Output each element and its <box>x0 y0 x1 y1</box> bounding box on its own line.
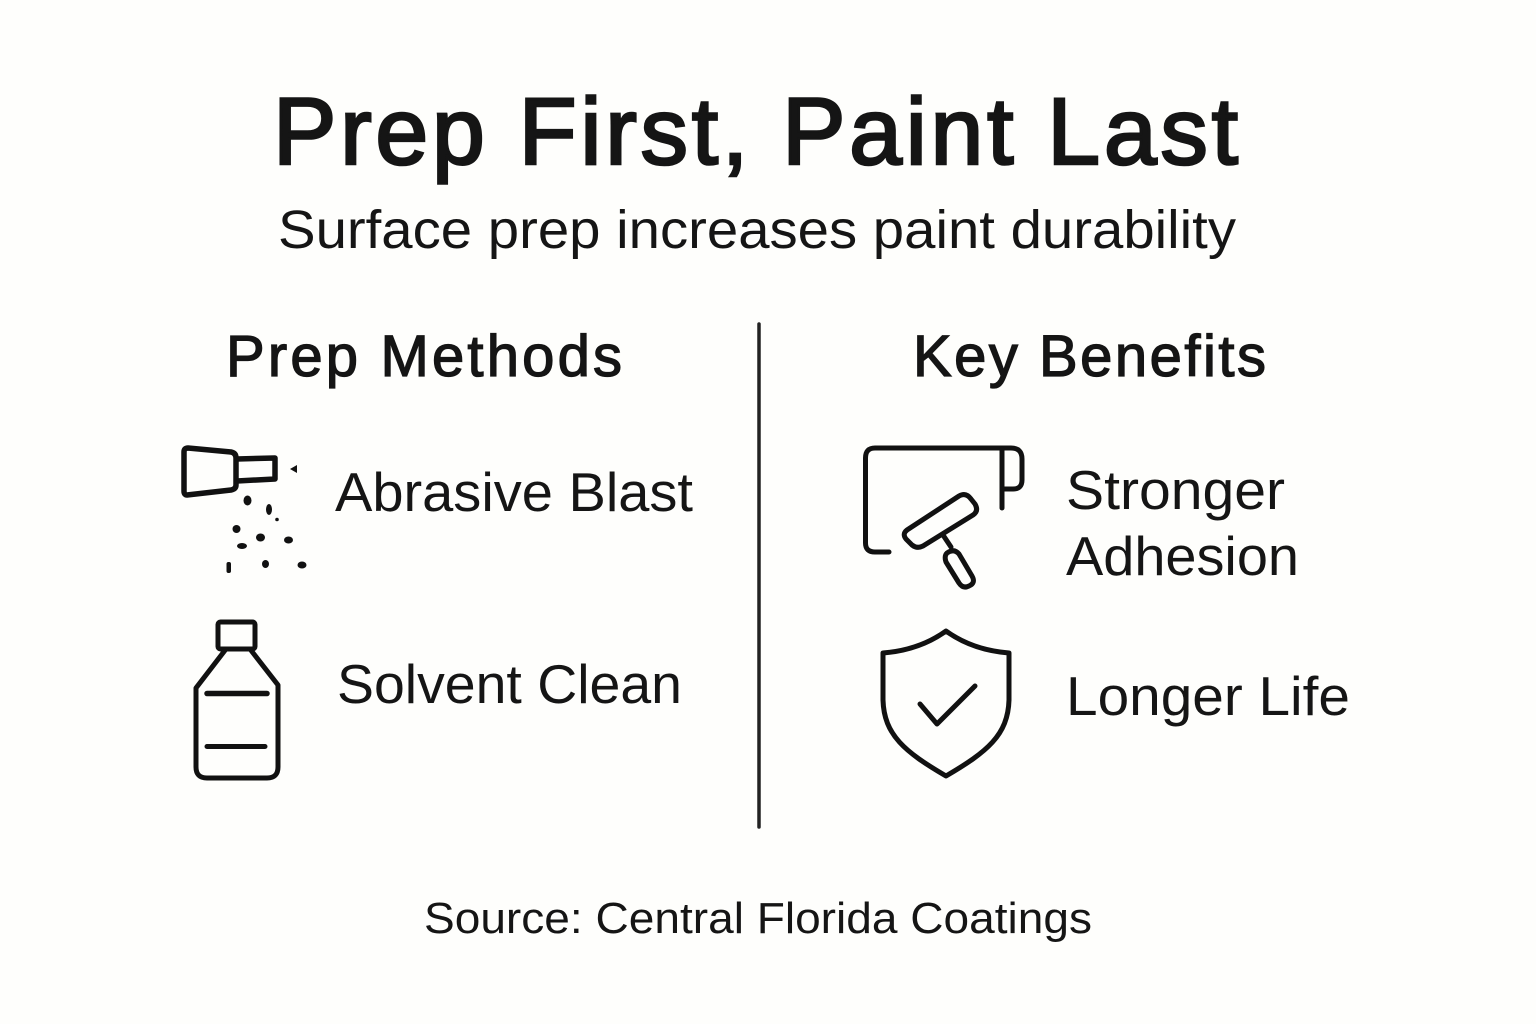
label: solvent clean: Solvent Clean <box>337 653 682 715</box>
heading: prep methods: Prep Methods <box>226 324 622 389</box>
icon: shield with check <box>883 631 1009 776</box>
label: stronger adhesion <box>1066 459 1299 587</box>
label: stronger adhesion: Stronger <box>1066 459 1285 521</box>
center divider <box>757 324 761 827</box>
subtitle: Surface prep increases paint durability <box>278 200 1236 260</box>
icon: solvent bottle <box>196 622 278 778</box>
heading: key benefits: Key Benefits <box>913 324 1266 389</box>
source note: Source: Central Florida Coatings <box>424 894 1092 943</box>
label: stronger adhesion: Adhesion <box>1066 525 1299 587</box>
title: Prep First, Paint Last <box>273 79 1238 185</box>
label: abrasive blast: Abrasive Blast <box>335 461 693 523</box>
icon: paint roller on wall <box>866 448 1022 587</box>
icon: abrasive blast nozzle <box>184 448 306 573</box>
label: longer life: Longer Life <box>1066 665 1350 727</box>
